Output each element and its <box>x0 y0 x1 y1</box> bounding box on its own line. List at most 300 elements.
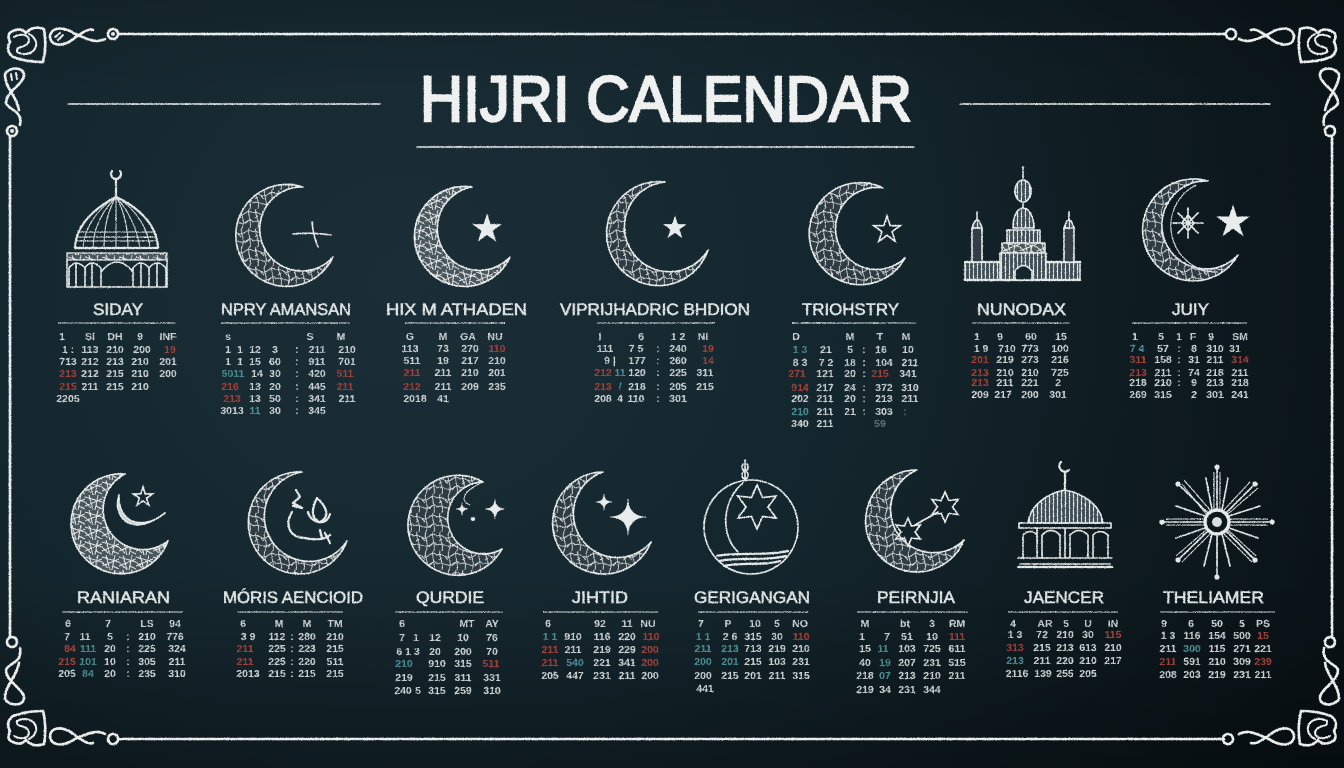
calendar table: 205 <box>669 381 687 393</box>
calendar table: 19 <box>879 657 891 669</box>
calendar table: 5 <box>1063 618 1069 630</box>
calendar table: 14 <box>702 355 714 367</box>
calendar table: 210 <box>1104 642 1122 654</box>
calendar table: 211 <box>1255 669 1272 681</box>
calendar table: 11 <box>79 631 91 643</box>
calendar table: 345 <box>308 405 326 417</box>
calendar table: 225 <box>669 367 687 379</box>
calendar table: 8 <box>1191 343 1197 355</box>
icon: mosque with towers <box>965 167 1080 280</box>
calendar table: 210 <box>1079 655 1097 667</box>
calendar table: 10 <box>457 632 469 644</box>
calendar table: 21 <box>844 406 856 418</box>
month: MORIS AENCIOID <box>223 472 363 680</box>
calendar table: 215 <box>326 668 344 680</box>
calendar table: : <box>295 344 299 356</box>
calendar table: 591 <box>1183 656 1201 668</box>
calendar table: 270 <box>461 343 479 355</box>
calendar table: 30 <box>771 631 783 643</box>
month name: RANIARAN <box>77 588 170 607</box>
calendar table: 229 <box>618 644 636 656</box>
calendar table: 911 <box>309 356 326 368</box>
calendar table: 211 <box>1155 367 1172 379</box>
calendar table: 372 <box>875 382 893 394</box>
calendar table: 205 <box>541 670 559 682</box>
calendar table: D <box>792 331 800 343</box>
calendar table: 515 <box>948 657 966 669</box>
calendar table: 213 <box>106 356 124 368</box>
calendar table: 6 <box>240 618 246 630</box>
calendar table: 210 <box>792 643 810 655</box>
calendar table: 511 <box>327 656 344 668</box>
calendar table: 100 <box>1051 343 1069 355</box>
calendar table: 211 <box>619 670 636 682</box>
calendar table: 914 <box>791 382 809 394</box>
month name: TRIOHSTRY <box>802 300 899 319</box>
calendar table: NU <box>487 331 503 343</box>
calendar table: 5 <box>847 344 853 356</box>
calendar table: 310 <box>1206 343 1224 355</box>
calendar table: : <box>295 356 299 368</box>
month name: NPRY AMANSAN <box>221 300 351 319</box>
calendar table: 341 <box>899 368 917 380</box>
calendar table: : <box>126 631 130 643</box>
calendar table: 1 : <box>62 344 74 356</box>
calendar table: 9 <box>997 331 1003 343</box>
calendar table: 219 <box>996 354 1014 366</box>
calendar table: 215 <box>744 656 762 668</box>
calendar table <box>594 331 714 405</box>
calendar table: : <box>862 393 866 405</box>
calendar table: : <box>862 406 866 418</box>
month name: JUIY <box>1172 300 1209 319</box>
calendar table: 5 <box>1158 331 1164 343</box>
calendar table: : <box>656 381 660 393</box>
icon: crescent and outlined star <box>809 183 905 285</box>
calendar table: 31 <box>1188 354 1200 366</box>
calendar table: 1 3 <box>1161 630 1175 642</box>
calendar table: 271 <box>1233 643 1251 655</box>
calendar table: 121 <box>816 368 834 380</box>
calendar table: 115 <box>1105 629 1122 641</box>
calendar table: 1 3 <box>1008 629 1022 641</box>
calendar table: 1 2 <box>671 331 685 343</box>
calendar table: 217 <box>461 355 479 367</box>
calendar table: : <box>903 406 907 418</box>
calendar table: 210 <box>138 631 156 643</box>
calendar table: 113 <box>402 343 419 355</box>
calendar table: 210 <box>1154 377 1172 389</box>
calendar table: 910 <box>564 631 582 643</box>
calendar table <box>58 618 186 680</box>
calendar table: 210 <box>1021 367 1039 379</box>
icon: crescent and filled star <box>414 186 510 286</box>
calendar table: 6 1 3 <box>396 646 420 658</box>
calendar table: 215 <box>58 656 76 668</box>
calendar table: F <box>1190 331 1197 343</box>
calendar table: 211 <box>817 406 834 418</box>
calendar table: 341 <box>618 657 636 669</box>
calendar table: 269 <box>1129 389 1147 401</box>
calendar table: 219 <box>856 684 874 696</box>
calendar table: 211 <box>237 643 254 655</box>
icon: crescent with calligraphy <box>248 472 347 574</box>
calendar table: 211 <box>404 367 421 379</box>
calendar table: 12 <box>429 632 441 644</box>
calendar table: 211 <box>1160 656 1177 668</box>
icon: crescent with shooting stars <box>866 470 964 572</box>
calendar table: 24 <box>844 382 856 394</box>
calendar table: : <box>862 344 866 356</box>
calendar table: 84 <box>64 643 76 655</box>
calendar table: 60 <box>269 356 281 368</box>
calendar table: 239 <box>1254 656 1272 668</box>
calendar table: : <box>1177 343 1181 355</box>
calendar table: 6 <box>1188 618 1194 630</box>
calendar table: : <box>295 405 299 417</box>
calendar table <box>1159 618 1272 681</box>
calendar table <box>971 331 1069 401</box>
calendar table <box>220 331 356 417</box>
calendar table: 213 <box>1056 642 1074 654</box>
calendar table: 10 <box>902 344 914 356</box>
calendar table: 218 <box>1129 377 1147 389</box>
calendar table: 213 <box>223 393 241 405</box>
calendar table: 211 <box>435 381 452 393</box>
calendar table: 311 <box>697 367 714 379</box>
calendar table: 280 <box>298 631 316 643</box>
calendar table: 305 <box>138 656 156 668</box>
calendar table: 210 <box>1208 656 1226 668</box>
calendar table: : <box>295 393 299 405</box>
month: PEIRNJIA <box>856 470 968 696</box>
calendar table: 713 <box>59 356 77 368</box>
calendar table: M <box>275 618 284 630</box>
calendar table: 212 <box>81 368 99 380</box>
icon: near-full crescent with stars <box>408 475 505 575</box>
calendar table: : <box>1177 377 1181 389</box>
icon: crescent with small crescent and star <box>71 474 168 574</box>
calendar table: 14 <box>251 368 263 380</box>
calendar table: 773 <box>1021 343 1039 355</box>
calendar table: 211 <box>902 393 919 405</box>
calendar table: 10 <box>749 618 761 630</box>
calendar table: 219 <box>593 644 611 656</box>
calendar table: 110 <box>628 393 645 405</box>
calendar table: 613 <box>1079 642 1097 654</box>
calendar table <box>236 618 344 680</box>
calendar table: 200 <box>641 644 659 656</box>
calendar table: NO <box>792 618 808 630</box>
calendar table: 94 <box>169 618 181 630</box>
calendar table: 215 <box>696 381 714 393</box>
calendar table: 111 <box>597 343 613 355</box>
calendar table: 110 <box>643 631 660 643</box>
calendar table: 231 <box>792 656 810 668</box>
calendar table: 217 <box>994 389 1012 401</box>
calendar table: 213 <box>594 381 612 393</box>
calendar table: NU <box>640 618 656 630</box>
calendar table: M <box>846 331 855 343</box>
calendar table: 211 <box>949 670 966 682</box>
calendar table: 111 <box>949 631 965 643</box>
calendar table: 11 <box>621 618 633 630</box>
calendar table: 215 <box>428 672 446 684</box>
calendar table: 5011 <box>222 368 245 380</box>
calendar table: 218 <box>628 381 646 393</box>
calendar table: 315 <box>744 631 762 643</box>
calendar table: 220 <box>1056 655 1074 667</box>
calendar table: 76 <box>486 632 498 644</box>
calendar table: 710 <box>998 343 1016 355</box>
calendar table: 211 <box>1034 655 1051 667</box>
calendar table: 4 <box>617 393 623 405</box>
calendar table <box>694 618 810 695</box>
calendar table: 20 <box>429 646 441 658</box>
calendar table: 213 <box>721 643 739 655</box>
calendar table: 202 <box>791 393 809 405</box>
calendar table: 12 <box>249 344 261 356</box>
calendar table: 1 <box>237 344 243 356</box>
calendar table: 1 <box>413 632 419 644</box>
month: NUNODAX <box>965 167 1080 401</box>
calendar table: 19 <box>702 343 714 355</box>
calendar table: SM <box>1232 331 1248 343</box>
calendar table: P <box>724 618 732 630</box>
calendar table: 1 <box>225 344 231 356</box>
calendar table: 31 <box>1229 343 1241 355</box>
corner ornament: bottom right <box>1223 637 1339 745</box>
calendar table: 7 <box>698 618 704 630</box>
calendar table: 210 <box>395 658 413 670</box>
calendar table <box>1006 618 1122 680</box>
calendar table: : <box>1177 367 1181 379</box>
calendar table: 311 <box>1130 354 1147 366</box>
calendar table: 231 <box>593 670 611 682</box>
calendar table: 271 <box>788 368 806 380</box>
calendar table: 301 <box>1206 389 1224 401</box>
calendar table: 200 <box>641 670 659 682</box>
calendar table: IN <box>1108 618 1118 630</box>
calendar table <box>394 618 501 697</box>
calendar table: 441 <box>696 683 714 695</box>
calendar table: 218 <box>1231 377 1249 389</box>
calendar table: 210 <box>923 670 941 682</box>
calendar table: 2 <box>1191 389 1197 401</box>
calendar table <box>56 331 177 405</box>
calendar table: 201 <box>744 670 762 682</box>
calendar table: : <box>656 355 660 367</box>
month: TRIOHSTRY <box>788 183 919 430</box>
calendar table: 7 <box>105 618 111 630</box>
calendar table: 115 <box>1209 643 1226 655</box>
calendar table: : <box>295 368 299 380</box>
calendar table: 511 <box>483 658 500 670</box>
calendar table: 208 <box>1159 669 1177 681</box>
calendar table: 314 <box>1231 354 1249 366</box>
calendar table: 301 <box>1049 389 1067 401</box>
calendar table: 218 <box>856 670 874 682</box>
month name: MÓRIS AENCIOID <box>223 588 363 607</box>
calendar table: 240 <box>669 343 687 355</box>
calendar table: GA <box>460 331 476 343</box>
calendar table: 34 <box>879 684 891 696</box>
calendar table: 611 <box>949 643 966 655</box>
calendar table: 211 <box>817 418 834 430</box>
calendar table: 10 <box>926 631 938 643</box>
calendar table: 213 <box>1129 367 1147 379</box>
calendar table: 1 9 <box>974 343 988 355</box>
calendar table: 40 <box>859 657 871 669</box>
calendar table: 2013 <box>236 668 260 680</box>
calendar table: 211 <box>542 644 559 656</box>
calendar table: 213 <box>971 367 989 379</box>
calendar table: 209 <box>461 381 479 393</box>
calendar table: 211 <box>817 393 834 405</box>
calendar table: 211 <box>1232 367 1249 379</box>
calendar table: 211 <box>435 367 452 379</box>
icon: crescent with two sparkle stars <box>553 472 651 574</box>
icon: double crescent with starburst and star <box>1143 179 1248 281</box>
calendar table: 6 <box>638 331 644 343</box>
month: QURDIE <box>394 475 505 697</box>
calendar table: INF <box>160 331 177 343</box>
title: HIJRI CALENDAR <box>420 63 912 135</box>
month name: THELIAMER <box>1163 588 1264 607</box>
calendar table: 223 <box>298 643 316 655</box>
calendar table: 201 <box>159 356 177 368</box>
calendar table: 315 <box>428 685 446 697</box>
calendar table: 20 <box>844 368 856 380</box>
calendar table: 15 <box>249 356 261 368</box>
calendar table: 20 <box>269 381 281 393</box>
calendar table: 211 <box>337 381 354 393</box>
calendar table: : <box>290 656 294 668</box>
calendar table: 30 <box>269 368 281 380</box>
calendar table: 5 <box>1239 618 1245 630</box>
calendar table: 2116 <box>1006 668 1029 680</box>
calendar table: AR <box>1037 618 1053 630</box>
calendar table: : <box>290 668 294 680</box>
calendar table: 331 <box>483 672 501 684</box>
calendar table: 8 3 <box>793 357 807 369</box>
calendar table: 210 <box>791 406 809 418</box>
calendar table: 315 <box>1154 389 1172 401</box>
calendar table: 92 <box>594 618 606 630</box>
calendar table: 2 <box>1055 377 1061 389</box>
calendar table: 7 2 <box>819 357 833 369</box>
calendar table: 60 <box>1025 331 1037 343</box>
calendar table: : <box>126 656 130 668</box>
calendar table: 9 <box>1161 618 1167 630</box>
calendar table: 217 <box>816 382 834 394</box>
calendar table: : <box>295 381 299 393</box>
calendar table: 500 <box>1233 630 1251 642</box>
calendar table: 6 <box>545 618 551 630</box>
calendar table: 158 <box>1154 354 1172 366</box>
calendar table: 2 6 <box>723 631 737 643</box>
calendar table: 103 <box>768 656 786 668</box>
calendar table: 235 <box>488 381 506 393</box>
calendar table: 216 <box>1051 354 1069 366</box>
calendar table: 1 <box>59 331 65 343</box>
month: SIDAY <box>56 171 177 405</box>
calendar table: 9 <box>1208 331 1214 343</box>
calendar table: I <box>599 331 602 343</box>
calendar table: 201 <box>971 354 989 366</box>
calendar table: 1 1 <box>696 631 710 643</box>
calendar table: 200 <box>1021 389 1039 401</box>
month name: QURDIE <box>416 588 484 607</box>
calendar table: 210 <box>131 368 149 380</box>
calendar table: 324 <box>168 643 186 655</box>
month: JAENCER <box>1006 462 1122 680</box>
calendar table: 13 <box>249 393 261 405</box>
calendar table: 225 <box>268 656 286 668</box>
calendar table: 215 <box>268 668 286 680</box>
calendar table: 111 <box>80 643 96 655</box>
calendar table: 104 <box>875 357 893 369</box>
month: VIPRIJHADRIC BHDION <box>560 182 750 405</box>
calendar table: / <box>619 381 622 393</box>
calendar table: 139 <box>1034 668 1052 680</box>
calendar table: NI <box>698 331 708 343</box>
calendar table: : <box>656 367 660 379</box>
calendar table: 300 <box>1183 643 1201 655</box>
calendar table: 420 <box>308 368 326 380</box>
calendar table: 255 <box>1056 668 1074 680</box>
calendar table: 1 <box>225 356 231 368</box>
calendar table: 5 <box>415 685 421 697</box>
calendar table: TM <box>327 618 343 630</box>
calendar table: 11 <box>614 367 626 379</box>
calendar table: 221 <box>1254 643 1272 655</box>
calendar table: 15 <box>1257 630 1269 642</box>
calendar table: 212 <box>594 367 612 379</box>
calendar table: 210 <box>326 631 344 643</box>
calendar table: 221 <box>593 657 611 669</box>
calendar table: M <box>337 331 346 343</box>
month: NPRY AMANSAN <box>220 184 356 417</box>
calendar table: 211 <box>565 644 582 656</box>
calendar table: 72 <box>1036 629 1048 641</box>
calendar table: 200 <box>159 368 177 380</box>
calendar table: 200 <box>454 646 472 658</box>
calendar table: 70 <box>486 646 498 658</box>
calendar table: 310 <box>483 685 501 697</box>
calendar table: 07 <box>879 670 891 682</box>
calendar table: : <box>656 393 660 405</box>
calendar table: 240 <box>394 685 412 697</box>
calendar table <box>788 331 919 430</box>
calendar table: 5 <box>774 618 780 630</box>
calendar table: 1 <box>859 631 865 643</box>
calendar table: SI <box>85 331 95 343</box>
corner ornament: bottom left <box>5 637 118 745</box>
calendar table: 215 <box>106 368 124 380</box>
calendar table: 21 <box>820 344 832 356</box>
calendar table: 19 <box>437 355 449 367</box>
calendar table: 1 <box>1176 331 1182 343</box>
calendar table: 220 <box>618 631 636 643</box>
calendar table: 113 <box>82 344 99 356</box>
calendar table: 7 4 <box>1130 343 1144 355</box>
calendar table: 215 <box>1033 642 1051 654</box>
calendar table: 221 <box>1021 377 1039 389</box>
calendar table: : <box>862 382 866 394</box>
calendar table: 51 <box>901 631 913 643</box>
calendar table: LS <box>140 618 154 630</box>
